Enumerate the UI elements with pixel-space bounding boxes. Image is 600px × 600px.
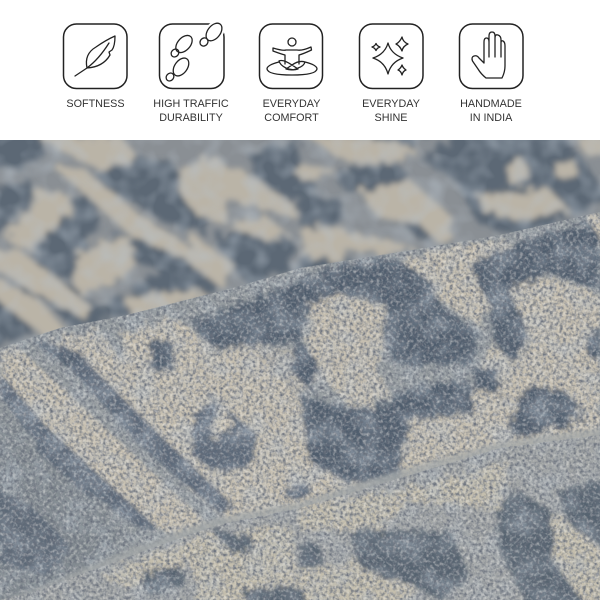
rug photograph: [0, 130, 600, 600]
lower fold of rug: [0, 420, 600, 600]
icon: handmade hand: [460, 24, 523, 88]
label: everyday shine: [362, 98, 420, 124]
label: high traffic durability: HIGH TRAFFIC: [153, 98, 229, 110]
background rug pattern, out of focus: [0, 130, 600, 355]
label: handmade in india: [460, 98, 522, 124]
label: high traffic durability: DURABILITY: [159, 112, 223, 124]
label: everyday comfort: EVERYDAY: [263, 98, 320, 110]
beige yarn areas on the roll: [0, 215, 600, 535]
label: high traffic durability: [153, 98, 229, 124]
slate yarn areas on the roll: [30, 222, 600, 485]
icon: high traffic footprints: [160, 19, 226, 89]
icon: everyday comfort meditating figure: [260, 24, 322, 88]
icon: softness feather: [64, 24, 127, 88]
label: everyday comfort: [263, 98, 320, 124]
diagonal stripes on the left: [0, 360, 310, 575]
label: handmade in india: IN INDIA: [470, 112, 513, 124]
label: everyday shine: EVERYDAY: [362, 98, 420, 110]
label: everyday shine: SHINE: [374, 112, 408, 124]
label: handmade in india: HANDMADE: [460, 98, 522, 110]
label: everyday comfort: COMFORT: [264, 112, 319, 124]
icon row: [64, 19, 523, 124]
icon: everyday shine sparkles: [360, 24, 423, 88]
crease between the folds: [0, 428, 600, 600]
foreground roll of rug: [0, 210, 600, 600]
label: softness: SOFTNESS: [66, 98, 125, 110]
pale beige highlights: [210, 400, 235, 440]
